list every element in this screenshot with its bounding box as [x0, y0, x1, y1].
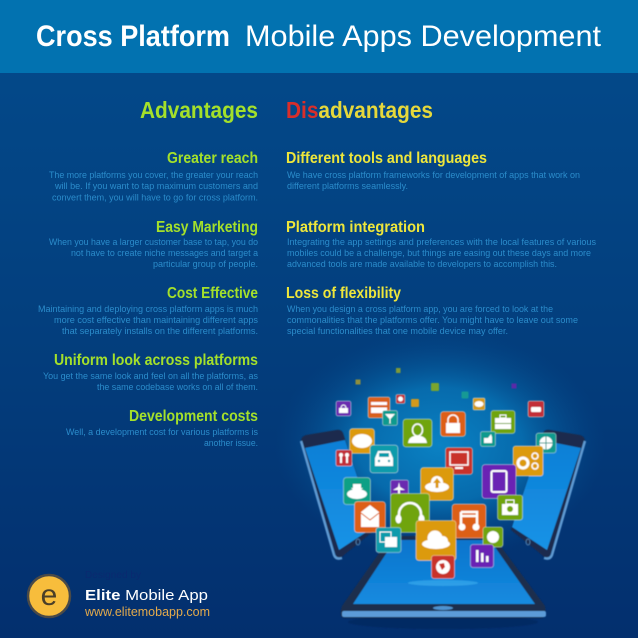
icon: bar chart — [470, 544, 494, 568]
icon: small leaf — [483, 527, 503, 547]
icon: bag — [336, 401, 351, 416]
icon: ball — [536, 433, 556, 453]
background glow — [275, 330, 605, 560]
icon: plane — [390, 480, 408, 497]
icon: thumbs up — [480, 432, 496, 446]
title banner — [0, 0, 638, 73]
item: loss of flexibility: When you design a cross platform app, you are forced to look at the — [287, 304, 553, 314]
icon: tablet — [341, 536, 546, 629]
company name: Elite Mobile App — [85, 587, 208, 604]
icon: camera — [498, 495, 522, 520]
icon: lock — [440, 412, 466, 436]
designed by: Designed by — [85, 570, 141, 581]
icon: gold cloud upload — [420, 468, 454, 500]
icon: radio — [528, 401, 544, 417]
icon: speech bubble — [350, 428, 374, 454]
icon: small gold — [411, 399, 419, 407]
item: loss of flexibility — [286, 285, 578, 336]
floating app icons — [336, 368, 556, 578]
item: greater reach — [49, 150, 258, 202]
heading: disadvantages: Disadvantages — [286, 97, 433, 123]
item: loss of flexibility: special functionalities that one mobile device may offer. — [287, 326, 508, 336]
item: greater reach: The more platforms you cover, the greater your reach — [49, 170, 258, 180]
icon: car — [370, 445, 398, 473]
icon: briefcase — [491, 410, 515, 434]
item: development costs: Well, a development cost for various platforms is — [66, 427, 258, 437]
icon: mail — [354, 502, 386, 532]
item: easy marketing — [49, 219, 259, 269]
item: greater reach: Greater reach — [167, 150, 258, 167]
item: development costs: another issue. — [204, 438, 258, 448]
item: uniform look: the same codebase works on all of them. — [97, 382, 258, 392]
item: cost effective: that separately installs on the different platforms. — [62, 326, 258, 336]
title: Cross Platform — [36, 20, 230, 53]
item: greater reach: convert them, you will have to go for cross platform. — [52, 192, 258, 202]
item: easy marketing: When you have a larger customer base to tap, you do — [49, 237, 258, 247]
item: cost effective: Maintaining and deploying cross platform apps is much — [38, 304, 258, 314]
icon: right phone — [511, 430, 585, 559]
icon: fork and spoon — [336, 450, 352, 466]
website: www.elitemobapp.com — [84, 605, 210, 619]
icon: tablet app — [482, 464, 516, 498]
item: development costs — [66, 408, 258, 448]
icon: left phone — [301, 430, 375, 559]
item: loss of flexibility: Loss of flexibility — [286, 285, 401, 302]
item: easy marketing: Easy Marketing — [156, 219, 258, 236]
item: uniform look — [43, 352, 258, 392]
item: cost effective: Cost Effective — [167, 285, 258, 302]
item: easy marketing: particular group of people. — [153, 259, 258, 269]
item: different tools: We have cross platform frameworks for development of apps that work on — [287, 170, 580, 180]
icon: headphones — [390, 494, 430, 532]
item: uniform look: You get the same look and feel on all the platforms, as — [43, 371, 258, 381]
item: development costs: Development costs — [129, 408, 258, 425]
item: easy marketing: not have to create niche messages and target a — [71, 248, 259, 258]
item: platform integration: Platform integration — [286, 219, 425, 236]
item: platform integration: advanced tools are made available to developers to accomplish this. — [287, 259, 557, 269]
item: platform integration: Integrating the app settings and preferences with the local features of various — [287, 237, 596, 247]
icon: music — [452, 504, 486, 538]
icon: small message — [473, 398, 485, 410]
icon: globe — [432, 556, 454, 578]
panel: disadvantages — [286, 97, 596, 336]
icon: small red — [396, 394, 405, 404]
item: cost effective — [38, 285, 258, 336]
logo and credit — [28, 570, 210, 619]
icon: copy — [376, 528, 401, 552]
item: different tools: Different tools and languages — [286, 150, 487, 167]
item: platform integration: mobiles could be a challenge, but things are easing out these days and more — [287, 248, 591, 258]
item: uniform look: Uniform look across platforms — [54, 352, 258, 369]
item: greater reach: will be. If you want to tap maximum customers and — [54, 181, 258, 191]
illustration: devices and app icons — [301, 368, 585, 629]
panel: advantages — [38, 97, 259, 448]
title: Mobile Apps Development — [245, 20, 602, 53]
heading: advantages: Advantages — [140, 97, 258, 123]
logo badge: e — [41, 579, 57, 612]
icon: cocktail — [382, 410, 398, 426]
icon: credit card — [368, 397, 390, 418]
logo badge — [28, 575, 70, 617]
item: loss of flexibility: commonalities that the platforms offer. You might have to leave out some — [287, 315, 578, 325]
item: platform integration — [286, 219, 596, 269]
item: different tools: different platforms seamlessly. — [287, 181, 408, 191]
icon: person — [403, 419, 432, 447]
icon: teal cloud — [344, 478, 370, 504]
icon: gears — [513, 446, 543, 476]
icon: gold cloud — [416, 520, 456, 560]
item: different tools — [286, 150, 580, 191]
icon: monitor — [446, 448, 472, 474]
item: cost effective: more cost effective than maintaining different apps — [54, 315, 258, 325]
